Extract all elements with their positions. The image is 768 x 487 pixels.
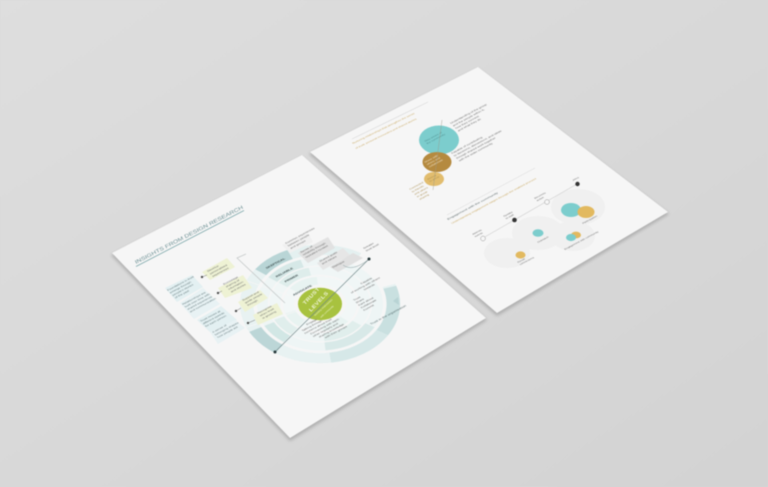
text: right side list: Commit	[362, 304, 375, 312]
chart: engagement timeline	[471, 176, 605, 268]
text: trust levels: LEVELS	[308, 291, 330, 313]
text: trust levels: with community	[320, 304, 335, 319]
text: lower list: sharing knowledge	[318, 323, 345, 338]
text: gold note: Connected	[408, 181, 425, 191]
text: teal note	[449, 103, 496, 132]
text: right side notes: of working with others	[350, 276, 381, 294]
heading: engagement with the community: Understanding engagement stages through the enabled process	[450, 177, 538, 225]
stage labels: Attends	[471, 228, 483, 236]
circle: teal: Stay aware of	[423, 131, 443, 143]
chart: stacked circles	[419, 120, 459, 190]
panel: research finding boxes: different speeds	[202, 311, 226, 325]
text: right side list: Care about	[357, 296, 374, 307]
top grey tabs: Common experiences	[284, 227, 316, 245]
page 1: insights from design research	[111, 155, 487, 441]
top grey tabs: between people	[287, 233, 310, 247]
top grey tabs: Dialogue	[331, 260, 346, 269]
panel: implication notes: Support and	[241, 290, 260, 302]
top grey tabs: and groups	[289, 239, 307, 250]
top grey tabs: Sense of	[299, 245, 314, 254]
panel: research finding boxes: Foundations in trust	[166, 275, 195, 292]
page 2: engagement and circles	[309, 67, 669, 316]
text: trust levels	[302, 286, 335, 319]
text: gold note	[408, 181, 435, 201]
bubbles	[516, 203, 594, 259]
panel: research finding boxes: emerge through	[169, 280, 192, 294]
stage labels: Social	[516, 257, 526, 264]
text: gold note: and others	[413, 186, 429, 196]
text: right side list: Trust	[352, 296, 361, 302]
panel: research finding boxes: Trust moves at	[199, 310, 221, 323]
panel: implication notes: through	[246, 299, 259, 307]
heading: engagement with the community: Engagement with the community	[446, 191, 499, 221]
circle: gold: Belong	[426, 174, 437, 181]
stage labels: active	[536, 196, 545, 202]
panel: research finding boxes: for each person	[204, 314, 228, 328]
text: teal note: and what they do	[457, 117, 482, 132]
panel: research finding boxes: shared experience	[186, 295, 213, 311]
stage labels: events	[474, 231, 484, 238]
text: trust levels: Building relationships	[314, 298, 334, 317]
text: gold note: sharing	[418, 193, 430, 201]
stage labels: to staff	[505, 213, 515, 220]
panel: research finding boxes: built over time with	[184, 292, 211, 308]
axis line	[433, 120, 442, 190]
panel: research finding boxes: and communication	[189, 297, 217, 313]
text: brown note: Capable of contributing	[450, 136, 484, 155]
bracket line	[237, 254, 285, 303]
ring labels: PRIMER	[284, 273, 300, 283]
circle: teal: the community	[426, 132, 447, 145]
chart: trust levels concentric rings	[218, 228, 422, 380]
circle: brown: others and	[426, 156, 442, 166]
stage markers	[481, 182, 580, 241]
ring: advocate	[276, 271, 364, 337]
connector dots	[201, 275, 255, 324]
panel: implication notes: sharing of	[225, 279, 240, 288]
panel: research finding boxes: A sense of	[211, 324, 228, 334]
text: right side notes	[347, 274, 384, 297]
top grey tabs: and values	[321, 255, 338, 265]
panel: research finding boxes: how people act	[216, 325, 239, 339]
panel: implication notes: Encourage	[222, 275, 239, 286]
panel: implication notes	[202, 258, 283, 325]
panel: implication notes: and stories	[230, 283, 247, 293]
text: brown note: with the wider community	[458, 142, 494, 162]
text: teal note: Understanding of the group	[449, 103, 488, 125]
heading: gold insight: Nurturing relationships that strengthen the sense	[351, 112, 416, 145]
panel: implication notes: Develop	[206, 264, 220, 273]
text: brown note: to decisions, discussions, and ideas	[453, 129, 503, 157]
circle: gold: to group	[428, 175, 441, 183]
heading: gold insight: of trust: personal encounters and shared stories	[354, 117, 418, 150]
text: right side notes: towards	[363, 283, 376, 291]
circle: teal	[419, 126, 459, 154]
stage labels: Participation	[581, 214, 599, 225]
label: drives trust: trust level	[365, 243, 380, 252]
trust levels centre	[298, 288, 342, 320]
panel: implication notes: Recognise	[256, 305, 273, 315]
label: drives trust: Greater	[362, 242, 375, 250]
top grey tabs	[282, 227, 363, 272]
icon: small arrow	[393, 297, 399, 305]
heading: insights from design research: INSIGHTS FROM DESIGN RESEARCH	[134, 205, 244, 265]
text: lower list: other regularly and	[312, 322, 339, 338]
text: lower list: with their groups	[324, 325, 349, 339]
circle: brown: collaborate	[428, 158, 444, 168]
stage labels: Outreach	[536, 235, 550, 244]
stage labels: Joins	[571, 176, 580, 182]
panel: research finding boxes: belonging shapes	[214, 321, 240, 336]
ring: primer	[257, 258, 383, 350]
text: right side list: Share	[355, 297, 365, 304]
ring labels: ADVOCATE	[292, 284, 314, 296]
top grey tabs: repeated contact	[304, 244, 329, 259]
text: brown note: through shared work together	[455, 137, 496, 160]
text: gold note: to friends	[411, 184, 425, 193]
trust axis line	[274, 258, 370, 354]
text: lower list: Connecting with each	[309, 317, 340, 335]
panel: implication notes: experiences	[211, 266, 230, 278]
circle: brown	[422, 152, 452, 172]
panel: implication notes: information	[227, 280, 245, 291]
label: towards the community: Trust in the organisation	[369, 304, 407, 326]
text: trust levels: TRUST	[302, 286, 322, 306]
text: teal note: how they connect	[454, 115, 480, 130]
text: lower list	[298, 310, 349, 345]
panel: research finding boxes: people's stories	[171, 283, 195, 297]
circle: brown: Share with	[423, 154, 439, 164]
top grey tabs: reliability through	[302, 242, 327, 256]
text: right side list	[352, 291, 380, 312]
stage labels: Becomes	[533, 191, 547, 200]
text: right side list: Collaborate	[360, 298, 378, 309]
panel: implication notes: is growing	[261, 310, 277, 320]
ring labels	[265, 257, 314, 296]
ring: reliable	[240, 245, 400, 363]
label: drives trust	[362, 240, 380, 252]
panel: research finding boxes	[165, 275, 245, 344]
stage labels: connections	[519, 256, 536, 266]
text: brown note	[450, 127, 508, 162]
text: lower list: Engage	[305, 318, 318, 326]
text: teal note: and the people within it,	[452, 108, 486, 127]
stage labels: Engagement with community	[563, 230, 600, 251]
ring labels: RELIABLE	[275, 266, 295, 278]
text: lower list: Talking through	[301, 319, 324, 332]
text: right side notes: Capable	[360, 277, 373, 285]
heading: engagement with the community	[446, 168, 538, 225]
ring: skeptical	[218, 228, 422, 380]
heading: gold insight	[351, 102, 428, 150]
panel: research finding boxes: of the past	[174, 289, 190, 299]
panel: implication notes: guide people	[244, 292, 263, 304]
panel: implication notes: when trust	[259, 307, 275, 317]
text: lower list: concerns about trust	[303, 318, 333, 335]
panel: implication notes: personalised	[209, 264, 228, 275]
text: gold note: in group	[416, 190, 429, 198]
top grey tabs: Shared goals	[318, 251, 339, 263]
stage labels	[471, 176, 600, 266]
curved arrow to trust dot	[343, 260, 368, 268]
stage labels: Speaks	[502, 210, 514, 218]
panel: research finding boxes: Relationships are	[181, 291, 207, 306]
circle: gold	[424, 172, 444, 186]
ring labels: SKEPTICAL	[265, 257, 286, 270]
